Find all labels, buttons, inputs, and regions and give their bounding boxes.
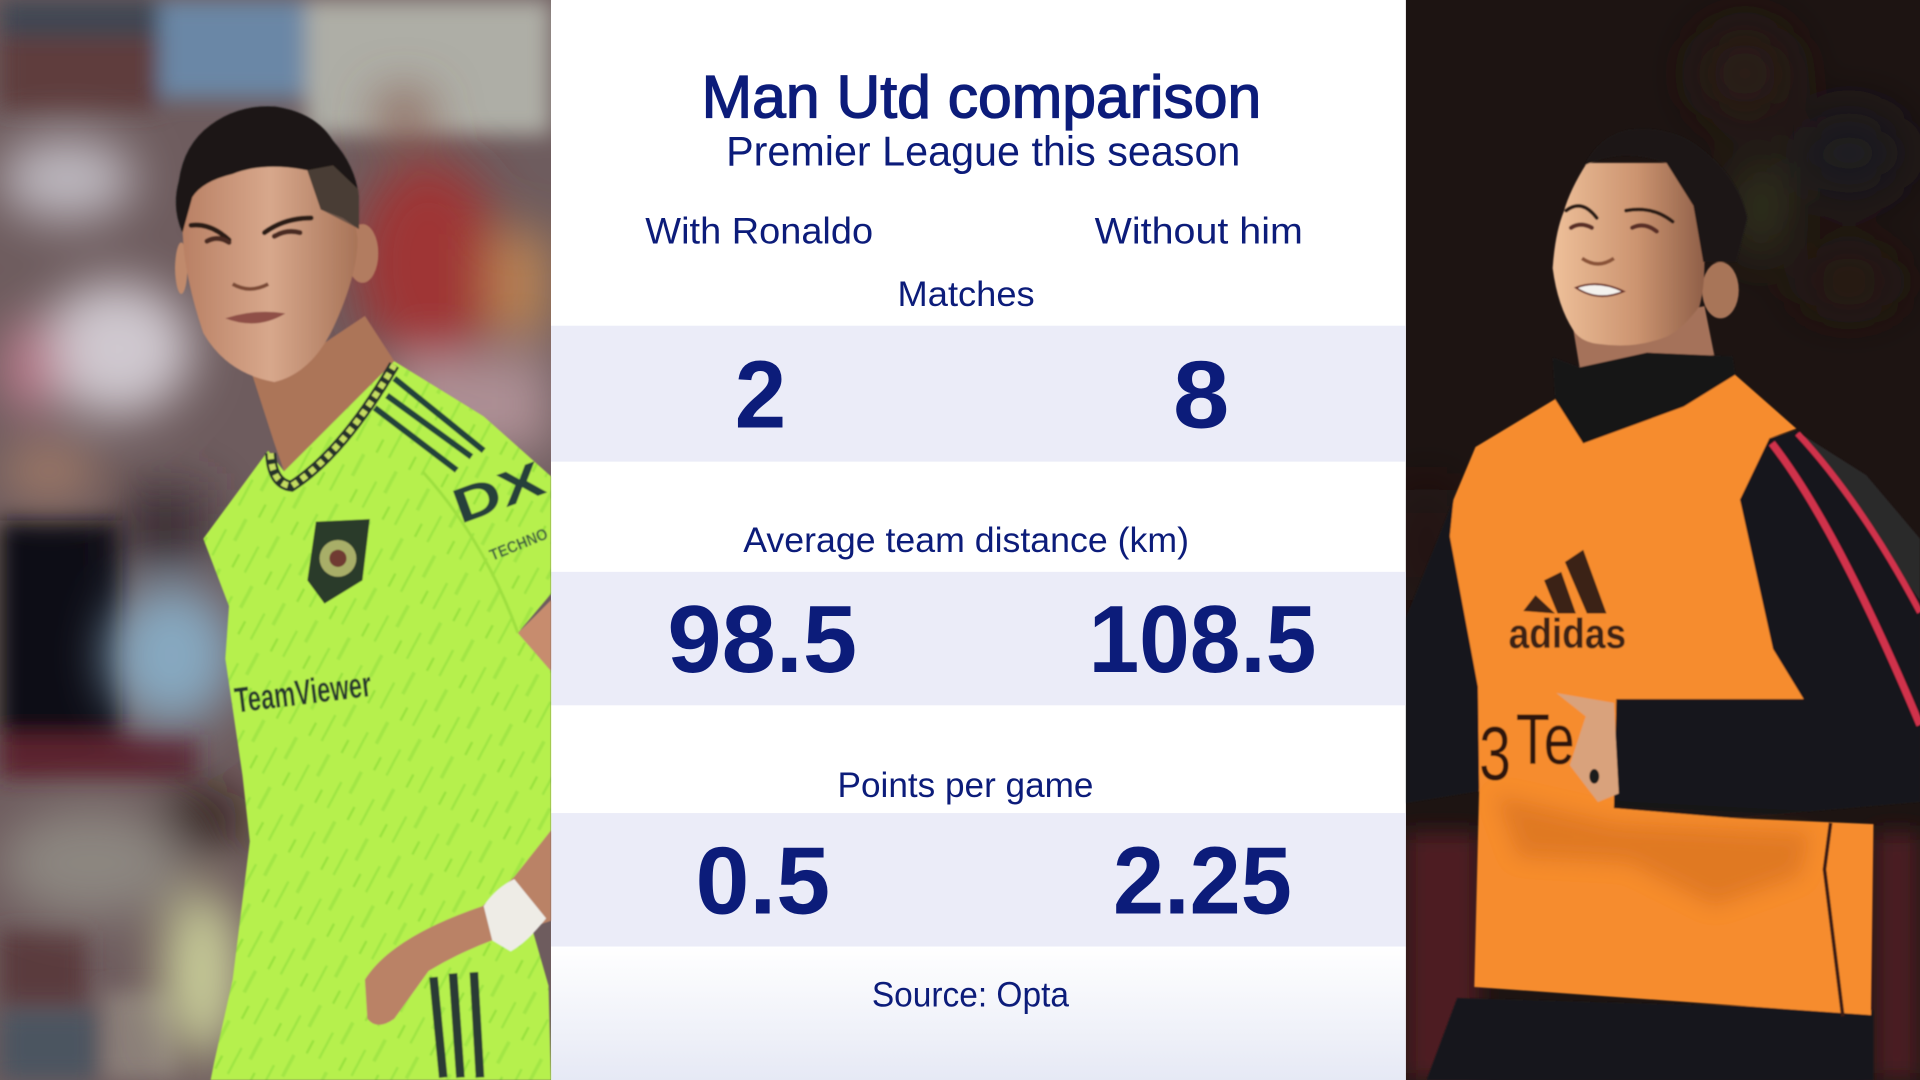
brows and eyes [1566,206,1673,231]
sleeve seam [422,471,518,633]
label: matches: Matches [898,274,1035,314]
photo panel: Ronaldo in green kit [0,0,552,1080]
black collar [1553,353,1735,443]
adidas wordmark: adidas [1509,610,1626,657]
jersey [203,361,551,1080]
label: average team distance: Average team distance (km) [743,520,1189,560]
value: matches with Ronaldo: 2 [735,342,786,448]
upper sleeve grey [1806,438,1920,599]
wristband [484,879,546,951]
orange bib [1450,375,1873,1015]
title: Man Utd comparison [702,64,1261,131]
left jacket sleeve [1406,500,1488,803]
bib sponsor numeral: 3 [1479,712,1511,797]
hair [176,106,359,233]
sleeve sponsor: DX [446,452,552,534]
shorts [1427,998,1873,1080]
stadium base colour [1406,0,1920,1080]
footer gradient [551,947,1406,1080]
ear [1702,262,1739,318]
hair [1584,129,1747,262]
photo panel: Ronaldo in orange training bib [1406,0,1920,1080]
lower red stands [1406,833,1920,1080]
adidas mark [1523,550,1607,613]
bib sponsor: Te [1516,701,1575,780]
band: matches [551,326,1406,462]
neck [250,316,394,471]
central white panel [551,0,1406,1080]
value: distance without him: 108.5 [1089,587,1316,693]
ear right [347,224,378,283]
hair fade [307,165,359,229]
collar [271,365,394,486]
ear left [175,242,187,294]
sleeve sponsor small: TECHNO [487,526,551,565]
forearm and hand [365,830,551,1025]
blurred crowd edge blobs [0,0,551,1080]
column heading: with Ronaldo: With Ronaldo [645,211,873,252]
shorts stripes [433,972,480,1078]
band: points per game [551,813,1406,947]
bib shadows [1496,796,1810,906]
blurred crowd background [0,92,551,1059]
source: Source: Opta [872,975,1069,1015]
neck [1573,306,1714,367]
nose shadow [1582,258,1614,264]
sleeve stripes [1772,433,1920,725]
face [1553,163,1704,345]
bib seam [1824,823,1843,1016]
crest [307,519,370,604]
value: points without him: 2.25 [1113,828,1292,934]
shoulder stripes [375,378,484,470]
nose shadow [233,284,268,289]
face [182,153,358,382]
band: average team distance [551,572,1406,705]
brows and eyes [191,218,311,242]
ring [1589,769,1599,784]
upper arm [518,600,551,671]
teeth [1576,284,1624,296]
value: distance with Ronaldo: 98.5 [667,587,857,693]
right jacket shoulder and arm [1614,431,1920,818]
subtitle: Premier League this season [726,127,1240,174]
player figure [1406,129,1920,1080]
value: points with Ronaldo: 0.5 [696,828,830,934]
player figure [175,106,552,1080]
value: matches without him: 8 [1173,342,1229,448]
label: points per game: Points per game [838,765,1093,805]
hand [1556,693,1619,802]
shirt sponsor: TeamViewer [232,664,374,721]
column heading: without him: Without him [1095,211,1303,252]
mouth [225,312,285,323]
crowd base colour [0,0,551,1080]
dark blurred stadium background [1408,24,1904,600]
